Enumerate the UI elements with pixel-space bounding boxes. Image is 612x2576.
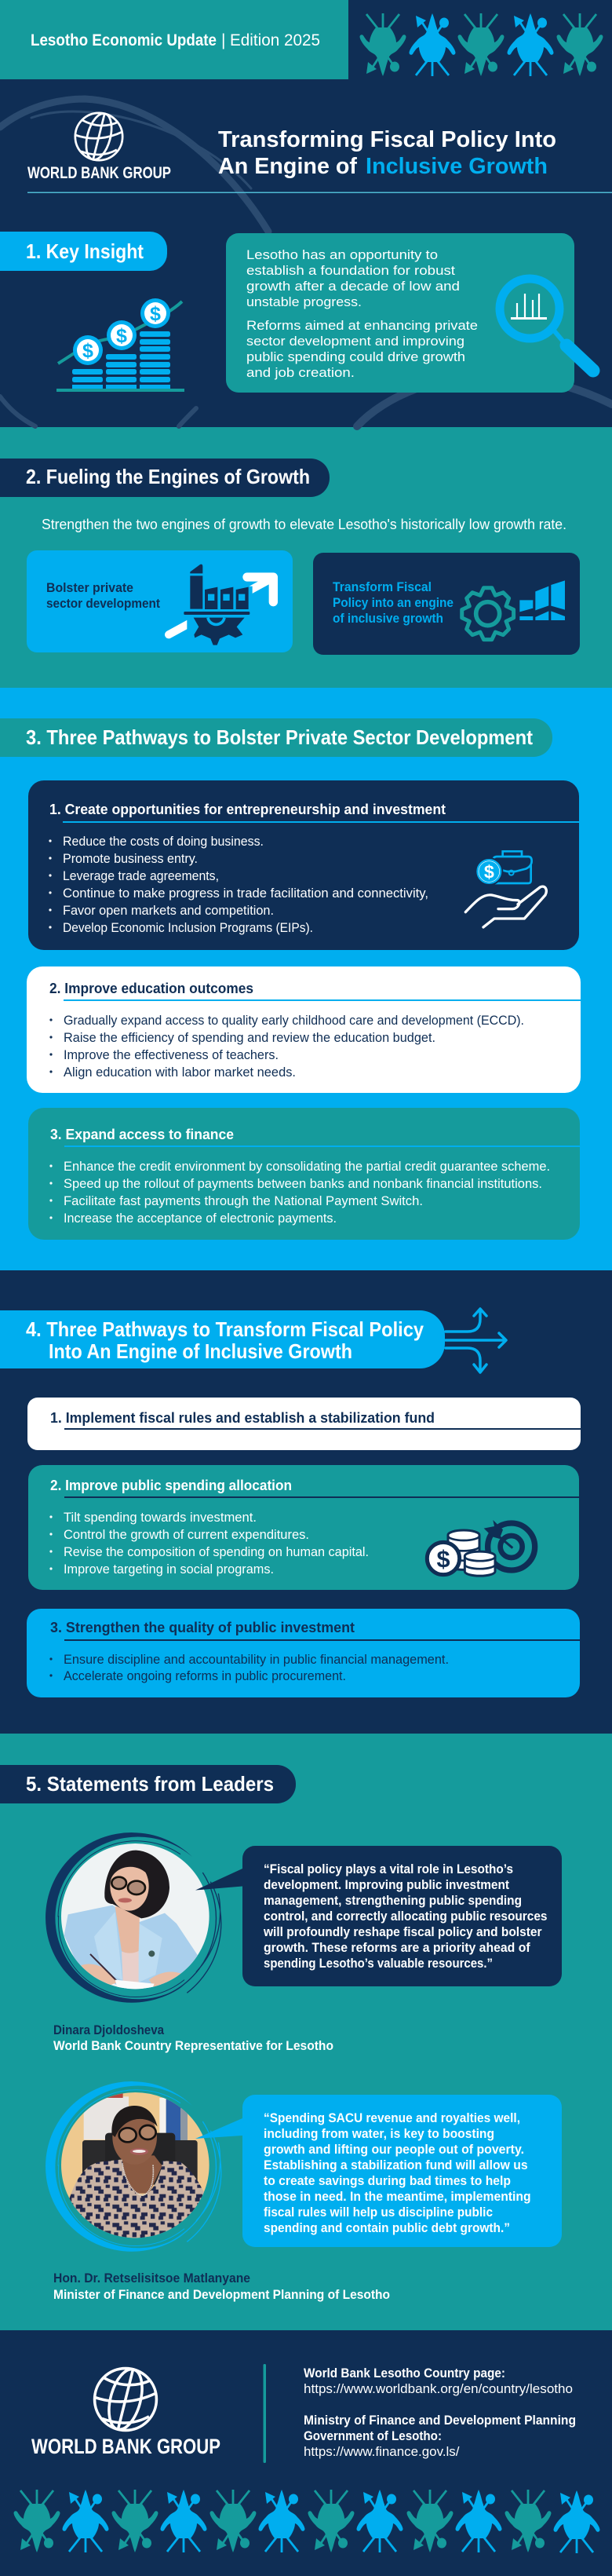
icon: magnifier bbox=[500, 279, 593, 371]
panel: expand access to finance: Enhance the credit environment by consolidating the partial credit guarantee scheme. bbox=[64, 1159, 550, 1174]
quote bubble: Dinara Djoldosheva: growth. These reforms are a priority ahead of bbox=[264, 1940, 530, 1955]
icon: coins and target: $ bbox=[436, 1546, 450, 1573]
attribution: Retselisitsoe Matlanyane bbox=[53, 2271, 390, 2302]
panel: improve education outcomes: Align education with labor market needs. bbox=[64, 1065, 296, 1080]
header banner: edition label bbox=[0, 0, 348, 79]
panel: key insight text: public spending could drive growth bbox=[246, 349, 465, 364]
icon: coin stacks growth chart: $ bbox=[150, 303, 161, 325]
icon: gear and bars bbox=[462, 580, 565, 640]
section 1 heading bbox=[0, 232, 167, 271]
footer links: Government of Lesotho: bbox=[304, 2428, 442, 2443]
panel: improve education outcomes: Gradually expand access to quality early childhood care and development (ECCD). bbox=[64, 1013, 524, 1028]
panel: expand access to finance: Speed up the rollout of payments between banks and nonbank financial institutions. bbox=[64, 1176, 542, 1191]
panel: improve public spending allocation bbox=[28, 1465, 579, 1590]
panel: expand access to finance: 3. Expand access to finance bbox=[50, 1127, 234, 1142]
attribution: Dinara Djoldosheva bbox=[53, 2022, 333, 2053]
section 2 heading bbox=[0, 459, 330, 497]
panel: key insight text: Reforms aimed at enhancing private bbox=[246, 318, 478, 333]
attribution: Retselisitsoe Matlanyane: Hon. Dr. Retselisitsoe Matlanyane bbox=[53, 2271, 250, 2286]
quote bubble: Retselisitsoe Matlanyane: to create savings during bad times to help bbox=[264, 2173, 511, 2188]
icon: three diverging arrows bbox=[446, 1309, 506, 1372]
panel: improve public spending allocation: Improve targeting in social programs. bbox=[64, 1562, 274, 1577]
header figures pattern bbox=[359, 13, 603, 76]
portrait: Dinara Djoldosheva bbox=[46, 1832, 221, 2003]
panel: transform fiscal policy: of inclusive growth bbox=[333, 612, 443, 626]
panel: strengthen quality of public investment: 3. Strengthen the quality of public investment bbox=[50, 1620, 355, 1635]
portrait: Retselisitsoe Matlanyane bbox=[46, 2081, 221, 2252]
decorative brush arcs bbox=[0, 99, 612, 426]
World Bank Group logo bbox=[27, 111, 171, 182]
panel: expand access to finance bbox=[28, 1108, 580, 1240]
footer links: Ministry of Finance and Development Planning bbox=[304, 2413, 576, 2428]
panel: improve education outcomes: 2. Improve education outcomes bbox=[49, 981, 253, 996]
panel: create opportunities: 1. Create opportunities for entrepreneurship and investment bbox=[49, 802, 446, 817]
icon: coin stacks growth chart: $ bbox=[82, 340, 93, 362]
footer links: World Bank Lesotho Country page: bbox=[304, 2366, 505, 2381]
quote bubble: Dinara Djoldosheva: management, strengthening public spending bbox=[264, 1893, 522, 1908]
quote bubble: Dinara Djoldosheva: “Fiscal policy plays a vital role in Lesotho’s bbox=[264, 1862, 513, 1876]
quote bubble: Retselisitsoe Matlanyane: growth and lifting our people out of poverty. bbox=[264, 2142, 524, 2157]
icon: hand holding briefcase and coin: $ bbox=[484, 862, 494, 882]
attribution: Dinara Djoldosheva: World Bank Country Representative for Lesotho bbox=[53, 2038, 333, 2053]
header banner: edition label: Edition 2025 bbox=[230, 31, 320, 49]
footer links bbox=[304, 2366, 576, 2459]
panel: bolster private sector bbox=[27, 550, 293, 652]
quote bubble: Retselisitsoe Matlanyane: Establishing a stabilization fund will allow us bbox=[264, 2158, 528, 2172]
panel: bolster private sector: Bolster private bbox=[46, 581, 133, 595]
section 4 heading: 4. Three Pathways to Transform Fiscal Policy bbox=[26, 1317, 424, 1341]
footer World Bank Group logo: WORLD BANK GROUP bbox=[31, 2435, 220, 2458]
header banner: edition label: Lesotho Economic Update bbox=[31, 31, 217, 49]
quote bubble: Retselisitsoe Matlanyane bbox=[195, 2095, 562, 2247]
quote bubble: Retselisitsoe Matlanyane: fiscal rules will help us discipline public bbox=[264, 2205, 493, 2220]
icon: coins and target bbox=[427, 1520, 535, 1576]
quote bubble: Dinara Djoldosheva: will profoundly reshape fiscal policy and bolster bbox=[263, 1924, 542, 1939]
section 5 heading: 5. Statements from Leaders bbox=[26, 1772, 274, 1796]
panel: transform fiscal policy: Policy into an engine bbox=[333, 596, 454, 610]
section 4 heading bbox=[0, 1310, 445, 1368]
panel: improve public spending allocation: Tilt spending towards investment. bbox=[64, 1510, 257, 1525]
quote bubble: Retselisitsoe Matlanyane: those in need. In the meantime, implementing bbox=[264, 2189, 531, 2204]
main title bbox=[218, 127, 556, 179]
panel: create opportunities: Leverage trade agreements, bbox=[63, 868, 219, 883]
main title: Transforming Fiscal Policy Into bbox=[218, 127, 556, 152]
quote bubble: Retselisitsoe Matlanyane: including from water, is key to boosting bbox=[264, 2126, 494, 2141]
panel: transform fiscal policy bbox=[313, 553, 580, 655]
panel: key insight text bbox=[226, 233, 574, 393]
footer World Bank Group logo bbox=[31, 2366, 220, 2458]
panel: key insight text: sector development and improving bbox=[246, 334, 464, 349]
section 2 heading: 2. Fueling the Engines of Growth bbox=[26, 465, 310, 488]
panel: create opportunities bbox=[28, 780, 579, 950]
quote bubble: Dinara Djoldosheva: control, and correctly allocating public resources bbox=[264, 1909, 548, 1924]
panel: key insight text: establish a foundation for robust bbox=[246, 263, 455, 278]
section 3 heading: 3. Three Pathways to Bolster Private Sector Development bbox=[26, 725, 533, 749]
panel: improve public spending allocation: 2. Improve public spending allocation bbox=[50, 1478, 292, 1493]
panel: create opportunities: Favor open markets and competition. bbox=[63, 903, 274, 918]
panel: key insight text: Lesotho has an opportunity to bbox=[246, 247, 438, 262]
footer links: https://www.worldbank.org/en/country/lesotho bbox=[304, 2381, 573, 2396]
icon: coin stacks growth chart: $ bbox=[116, 325, 127, 347]
panel: bolster private sector: sector development bbox=[46, 597, 160, 611]
icon: factory on gear with arrow bbox=[169, 565, 273, 645]
panel: strengthen quality of public investment bbox=[27, 1609, 580, 1697]
attribution: Dinara Djoldosheva: Dinara Djoldosheva bbox=[53, 2022, 164, 2037]
panel: strengthen quality of public investment: Accelerate ongoing reforms in public procurement. bbox=[64, 1668, 346, 1683]
section 2 intro text: Strengthen the two engines of growth to elevate Lesotho's historically low growth rate. bbox=[42, 517, 566, 532]
icon: hand holding briefcase and coin bbox=[465, 851, 546, 927]
section 3 heading bbox=[0, 718, 552, 757]
footer figures pattern bbox=[14, 2490, 599, 2553]
quote bubble: Dinara Djoldosheva: spending Lesotho’s valuable resources.” bbox=[264, 1956, 493, 1971]
panel: improve education outcomes bbox=[27, 966, 581, 1093]
panel: create opportunities: Promote business entry. bbox=[63, 851, 198, 866]
section 4 heading: Into An Engine of Inclusive Growth bbox=[49, 1339, 352, 1363]
panel: transform fiscal policy: Transform Fiscal bbox=[333, 580, 432, 594]
panel: implement fiscal rules: 1. Implement fiscal rules and establish a stabilization fund bbox=[50, 1410, 435, 1426]
World Bank Group logo: WORLD BANK GROUP bbox=[27, 164, 171, 182]
attribution: Retselisitsoe Matlanyane: Minister of Finance and Development Planning of Lesotho bbox=[53, 2287, 390, 2302]
panel: key insight text: unstable progress. bbox=[246, 294, 362, 309]
panel: expand access to finance: Increase the acceptance of electronic payments. bbox=[64, 1211, 337, 1226]
panel: key insight text: and job creation. bbox=[246, 365, 355, 380]
panel: create opportunities: Develop Economic Inclusion Programs (EIPs). bbox=[63, 920, 313, 935]
panel: improve public spending allocation: Revise the composition of spending on human capital. bbox=[64, 1544, 369, 1559]
main title: Inclusive Growth bbox=[366, 154, 548, 179]
quote bubble: Retselisitsoe Matlanyane: spending and contain public debt growth.” bbox=[264, 2220, 510, 2235]
main title: An Engine of bbox=[218, 154, 357, 179]
header banner: edition label: | bbox=[221, 31, 225, 49]
quote bubble: Retselisitsoe Matlanyane: “Spending SACU revenue and royalties well, bbox=[264, 2110, 520, 2125]
panel: key insight text: growth after a decade of low and bbox=[246, 279, 460, 294]
section 1 heading: 1. Key Insight bbox=[26, 239, 144, 263]
panel: expand access to finance: Facilitate fast payments through the National Payment Switch. bbox=[64, 1193, 423, 1208]
panel: improve public spending allocation: Control the growth of current expenditures. bbox=[64, 1527, 309, 1542]
panel: strengthen quality of public investment: Ensure discipline and accountability in public financial management. bbox=[64, 1652, 449, 1667]
quote bubble: Dinara Djoldosheva: development. Improving public investment bbox=[264, 1877, 509, 1892]
panel: create opportunities: Reduce the costs of doing business. bbox=[63, 834, 264, 849]
quote bubble: Dinara Djoldosheva bbox=[195, 1846, 562, 1986]
panel: implement fiscal rules bbox=[27, 1398, 581, 1450]
panel: create opportunities: Continue to make progress in trade facilitation and connectivity, bbox=[63, 886, 428, 901]
panel: improve education outcomes: Improve the effectiveness of teachers. bbox=[64, 1047, 279, 1062]
panel: improve education outcomes: Raise the efficiency of spending and review the education budget. bbox=[64, 1030, 435, 1045]
icon: coin stacks growth chart bbox=[56, 298, 184, 392]
footer links: https://www.finance.gov.ls/ bbox=[304, 2444, 460, 2459]
section 5 heading bbox=[0, 1765, 296, 1803]
